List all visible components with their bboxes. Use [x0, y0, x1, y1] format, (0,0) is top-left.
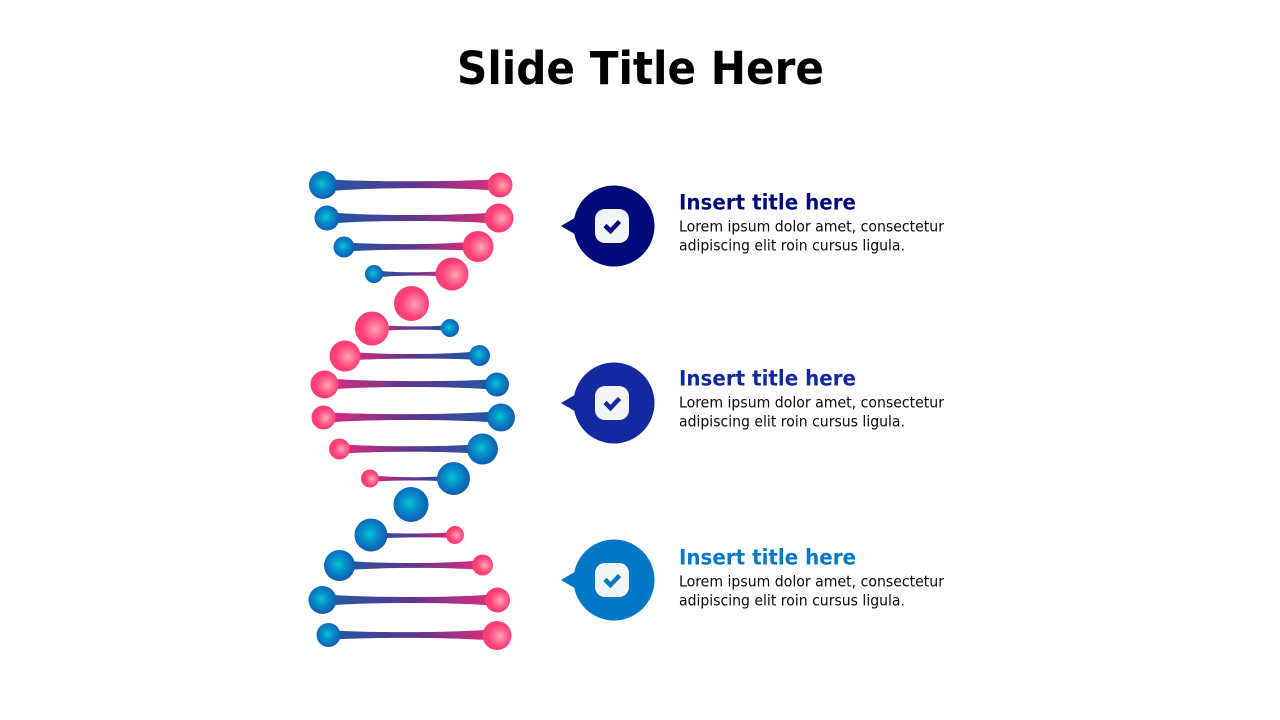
rung 14 — [324, 550, 493, 581]
item 3 — [561, 540, 945, 620]
rung 2 — [314, 204, 514, 232]
icon: speech bubble check 2 — [561, 362, 654, 444]
rung 1 — [309, 171, 512, 199]
rung 6 — [355, 312, 459, 346]
title: Slide Title Here — [457, 42, 824, 95]
rung 15 — [308, 586, 510, 614]
text block 1: adipiscing elit roin cursus ligula. — [679, 236, 905, 254]
icon: speech bubble check 3 — [561, 540, 654, 620]
icon: speech bubble check 1 — [561, 186, 654, 266]
item 1 — [561, 186, 945, 266]
rung 16 — [316, 621, 512, 650]
rung 4 — [365, 258, 468, 290]
sphere: pink crossing — [394, 286, 429, 321]
rung 8 — [310, 370, 509, 398]
heading 2: Insert title here — [679, 366, 856, 390]
sphere: blue crossing — [394, 487, 428, 522]
rung 11 — [361, 462, 470, 495]
text block 2: Lorem ipsum dolor amet, consectetur — [679, 394, 945, 412]
rung 10 — [329, 434, 498, 464]
text block 3: adipiscing elit roin cursus ligula. — [679, 592, 905, 610]
text block 1: Lorem ipsum dolor amet, consectetur — [679, 218, 945, 236]
rung 3 — [334, 231, 494, 262]
DNA helix illustration — [308, 171, 515, 650]
rung 7 — [330, 340, 490, 372]
rung 9 — [312, 404, 515, 432]
text block 3: Lorem ipsum dolor amet, consectetur — [679, 572, 945, 590]
text block 2: adipiscing elit roin cursus ligula. — [679, 412, 905, 430]
item 2 — [561, 362, 945, 444]
heading 3: Insert title here — [679, 546, 856, 570]
rung 13 — [354, 518, 464, 552]
heading 1: Insert title here — [679, 190, 856, 214]
